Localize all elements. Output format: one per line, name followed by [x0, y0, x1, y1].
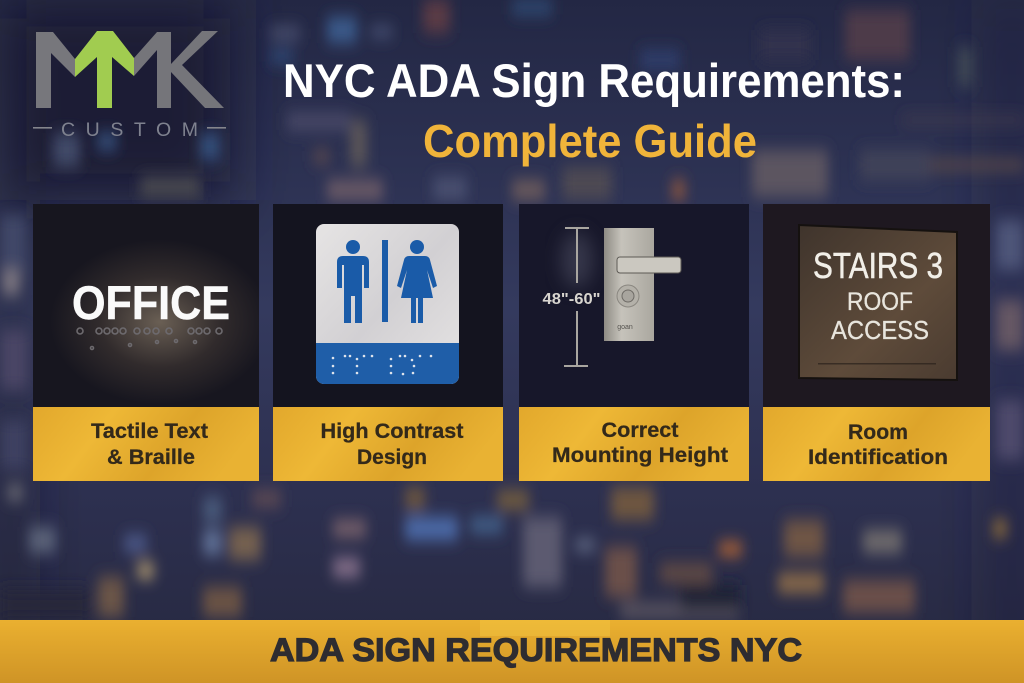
- panel: correct mounting height: Correct: [602, 419, 678, 442]
- stairs sign: ACCESS: [831, 315, 929, 345]
- braille dots: [332, 355, 432, 375]
- title: [283, 54, 905, 167]
- divider bar: [382, 240, 388, 322]
- door lever plate: goan: [617, 324, 633, 331]
- braille dots: [77, 328, 222, 350]
- icon: woman: [397, 240, 437, 323]
- caption bar: [273, 407, 503, 481]
- panel: high contrast design: High Contrast: [320, 420, 464, 443]
- panel: high contrast design: [273, 204, 503, 481]
- title: Complete Guide: [423, 115, 757, 167]
- door lever plate: [604, 228, 681, 341]
- icon: man: [337, 240, 369, 323]
- stairs sign: [799, 225, 957, 380]
- caption bar: [33, 407, 259, 481]
- footer banner: [0, 620, 1024, 683]
- panel: correct mounting height: [519, 204, 749, 481]
- caption bar: [763, 407, 990, 481]
- panel: tactile text and braille: Tactile Text: [91, 420, 208, 443]
- restroom sign: [316, 224, 459, 384]
- panel: tactile text and braille: & Braille: [107, 446, 195, 469]
- panel: tactile text and braille: [33, 204, 259, 481]
- sign text: OFFICE: OFFICE: [72, 276, 230, 329]
- stairs sign: ROOF: [847, 288, 913, 316]
- panel: high contrast design: Design: [357, 446, 427, 469]
- title: NYC ADA Sign Requirements:: [283, 54, 905, 107]
- panel: correct mounting height: Mounting Height: [552, 444, 728, 467]
- height label: 48"-60": [542, 291, 600, 308]
- panel: room identification: Identification: [808, 446, 948, 469]
- panel: room identification: Room: [848, 421, 908, 444]
- logo: MMK Custom: [33, 31, 226, 141]
- panel: room identification: [763, 204, 990, 481]
- caption bar: [519, 407, 749, 481]
- footer banner: ADA SIGN REQUIREMENTS NYC: [270, 632, 802, 668]
- logo: MMK Custom: CUSTOM: [61, 119, 198, 141]
- height dimension line: [564, 227, 589, 367]
- stairs sign: STAIRS 3: [813, 245, 943, 286]
